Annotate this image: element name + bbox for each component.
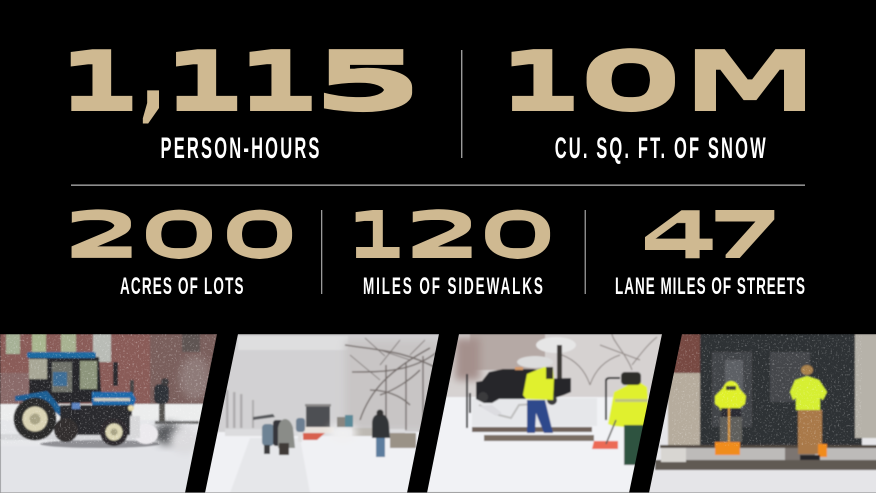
label: miles of sidewalks: MILES OF SIDEWALKS bbox=[363, 273, 543, 300]
stat: 47 lane miles of streets bbox=[615, 199, 805, 300]
number: 200: 0 bbox=[136, 200, 222, 271]
number: 1,115: 1 bbox=[160, 36, 248, 127]
photo: two workers with orange shovels at a dark entrance bbox=[640, 334, 876, 493]
number: 1,115: 1 bbox=[233, 37, 323, 128]
label: cu. sq. ft. of snow: CU. SQ. FT. OF SNOW bbox=[555, 132, 766, 165]
number: 1,115: , bbox=[136, 30, 170, 129]
label: acres of lots: ACRES OF LOTS bbox=[120, 273, 243, 300]
number: 120 bbox=[340, 199, 560, 271]
number: 200 bbox=[57, 200, 302, 271]
number: 200: 2 bbox=[57, 200, 147, 271]
number: 47: 7 bbox=[703, 199, 788, 271]
stat: 200 acres of lots bbox=[57, 200, 302, 300]
number: 1,115: 5 bbox=[309, 36, 426, 127]
label: person-hours: PERSON-HOURS bbox=[160, 132, 319, 165]
number: 1,115: 1 bbox=[54, 36, 143, 127]
label: lane miles of streets: LANE MILES OF STREETS bbox=[615, 273, 805, 300]
stat: 120 miles of sidewalks bbox=[340, 199, 560, 300]
photo: workers in yellow jackets shoveling steps bbox=[420, 334, 670, 493]
number: 120: 2 bbox=[398, 200, 487, 271]
number: 120: 0 bbox=[475, 200, 560, 271]
stat: 10M cubic feet of snow bbox=[495, 36, 820, 165]
number: 120: 1 bbox=[340, 199, 410, 271]
number: 200: 0 bbox=[217, 200, 302, 271]
number: 10M: 1 bbox=[495, 37, 585, 128]
stat: 1,115 person-hours bbox=[54, 30, 426, 165]
number: 10M: M bbox=[680, 36, 820, 127]
number: 47 bbox=[635, 199, 788, 271]
photo: pedestrians and plow on snowy walkway bbox=[200, 334, 445, 493]
number: 1,115 bbox=[54, 30, 426, 129]
number: 10M bbox=[495, 36, 820, 128]
number: 10M: 0 bbox=[577, 36, 684, 127]
photo: tractor clearing snow in front of brick building bbox=[0, 334, 220, 493]
number: 47: 4 bbox=[635, 200, 722, 271]
